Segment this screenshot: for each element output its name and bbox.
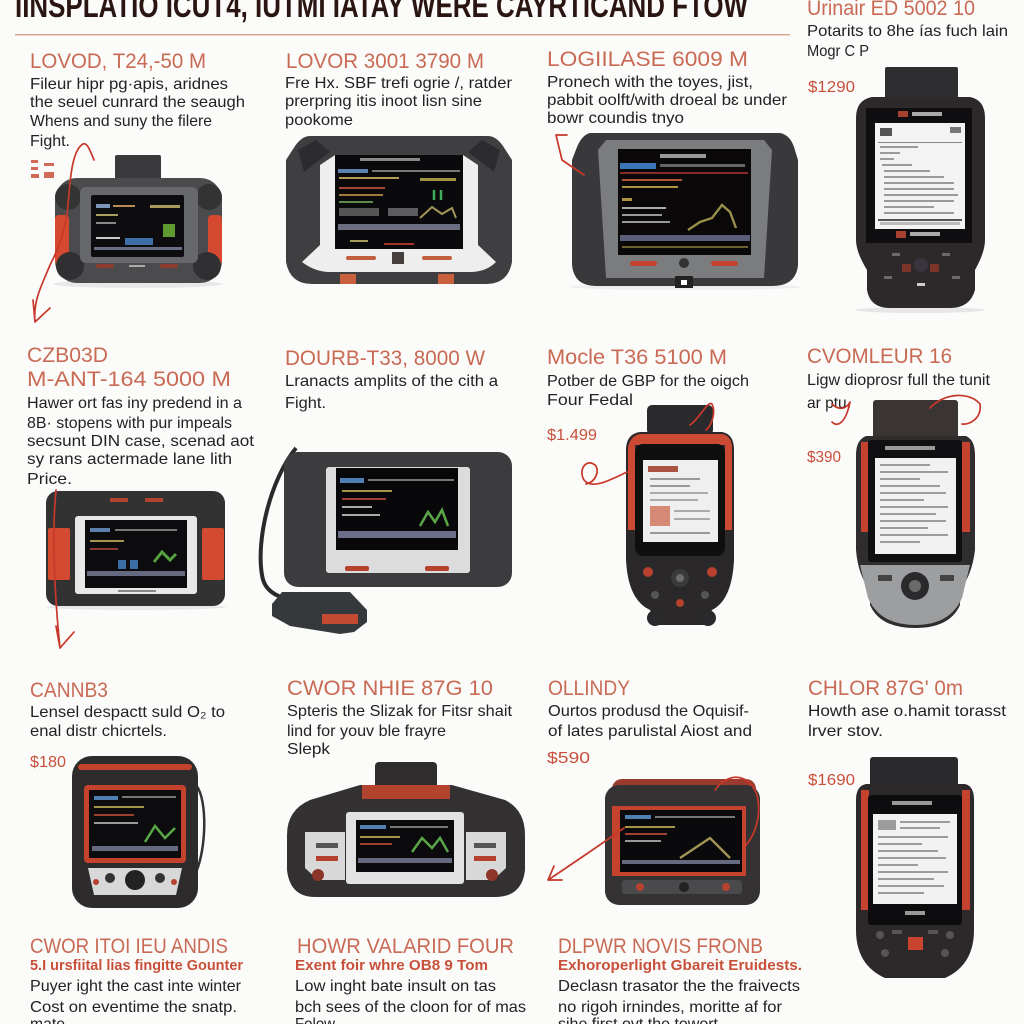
description: product 3	[547, 74, 788, 127]
panel: product 10	[287, 677, 525, 897]
price: product 4: $1290	[808, 79, 855, 96]
description: product 6	[285, 373, 498, 412]
description: product 1: Whens and suny the filere	[30, 113, 212, 130]
arrow: callout line 8b	[930, 395, 980, 424]
description: product 9: Lensel despactt suld O₂ to	[30, 704, 225, 721]
heading: product 5	[27, 344, 231, 391]
description: product 9	[30, 704, 225, 740]
heading: product 1: LOVOD, T24,-50 M	[30, 50, 206, 73]
subheading: footer 2: Exent foir whre OB8 9 Tom	[295, 958, 488, 974]
panel: product 9	[30, 679, 225, 908]
heading: product 2: LOVOR 3001 3790 M	[286, 50, 484, 73]
description: footer 3	[558, 978, 800, 1024]
description: product 8	[807, 372, 991, 412]
description: product 6: Lranacts amplits of the cith a	[285, 373, 498, 390]
description: product 5: Hawer ort fas iny predend in a	[27, 395, 242, 412]
description: product 6: Fight.	[285, 395, 326, 412]
description: product 7: Potber de GBP for the oigch	[547, 373, 749, 390]
icon: scan tool 1	[53, 155, 223, 288]
description: product 5	[27, 395, 255, 488]
price: product 9: $180	[30, 754, 66, 771]
heading: footer 2: HOWR VALARID FOUR	[297, 935, 514, 958]
panel: product 7	[547, 346, 749, 626]
description: product 2: pookome	[285, 112, 353, 129]
icon: scan tool 6 with cable and connector	[261, 448, 512, 634]
description: product 1: the seuel cunrard the seaugh	[30, 94, 245, 111]
description: product 7	[547, 373, 749, 409]
description: product 4	[807, 23, 1008, 60]
icon: scan tool 5	[46, 491, 226, 610]
heading: product 12: CHLOR 87G' 0m	[808, 677, 963, 700]
heading: product 5: CZB03D	[27, 344, 108, 367]
price: product 7: $1.499	[547, 427, 597, 444]
arrow: callout line 8a	[832, 402, 850, 424]
description: product 5: Price.	[27, 471, 72, 488]
description: product 11: of lates parulistal Aiost and	[548, 723, 752, 740]
panel: product 11	[547, 677, 760, 905]
description: footer 3: no rigoh irnindes, moritte af for	[558, 999, 783, 1016]
description: product 12: lrver stov.	[808, 723, 883, 740]
icon: scan tool 11	[605, 779, 760, 905]
price: product 8: $390	[807, 449, 841, 466]
arrow: callout line 11a	[548, 828, 624, 880]
description: footer 1	[30, 978, 242, 1024]
panel: product 8	[807, 345, 991, 628]
heading: product 7: Mocle T36 5100 M	[547, 346, 727, 369]
panel: product 2	[285, 50, 513, 284]
icon: scan tool 10	[287, 762, 525, 897]
icon: scan tool 9	[72, 756, 204, 908]
description: product 10: Slepk	[287, 741, 331, 758]
panel: product 3	[547, 48, 800, 290]
heading: product 3: LOGIILASE 6009 M	[547, 48, 748, 71]
panel: footer column 2	[295, 935, 526, 1024]
description: product 1: Fileur hipr pg·apis, aridnes	[30, 76, 228, 93]
description: product 8: Ligw dioprosr full the tunit	[807, 372, 991, 389]
icon: scan tool 3	[570, 133, 800, 290]
icon: scan tool 7	[626, 405, 734, 626]
subheading: footer 1: 5.I ursfiital lias fingitte Gounter	[30, 958, 243, 974]
description: product 7: Four Fedal	[547, 392, 633, 409]
description: footer 2: Low inght bate insult on tas	[295, 978, 496, 995]
icon: scan tool 12	[856, 757, 974, 978]
panel: product 4	[807, 0, 1008, 313]
icon: scan tool 4	[855, 67, 985, 313]
arrow: callout line 7a	[582, 463, 627, 484]
heading: product 9: CANNB3	[30, 679, 108, 702]
subheading: footer 3: Exhoroperlight Gbareit Eruidests.	[558, 958, 802, 974]
icon: scan tool 8	[856, 400, 975, 628]
arrow: callout line 11b	[715, 777, 759, 845]
description: product 2: Fre Hx. SBF trefi ogrie /, ratder	[285, 75, 513, 92]
panel: footer column 1	[30, 935, 243, 1024]
description: footer 1: Cost on eventime the snatp.	[30, 999, 237, 1016]
description: product 1	[30, 76, 245, 150]
arrow: callout line 5	[54, 490, 74, 648]
description: product 10: lind for youv ble frayre	[287, 723, 446, 740]
panel: footer column 3	[558, 935, 802, 1024]
description: product 8: ar ptu.	[807, 395, 851, 412]
description: footer 3: Declasn trasator the the fraivects	[558, 978, 800, 995]
description: product 12	[808, 703, 1007, 740]
description: product 4: Potarits to 8he ías fuch lain	[807, 23, 1008, 40]
panel: product 1	[30, 50, 245, 322]
panel: product 5	[27, 344, 255, 648]
description: product 2: prerpring itis inoot lisn sine	[285, 93, 482, 110]
arrow: callout line 1	[33, 144, 94, 322]
icon: price scribble 1	[31, 160, 54, 178]
arrow: callout line 7b	[690, 403, 714, 430]
price: product 11: $590	[547, 750, 590, 767]
heading: footer 1: CWOR ITOI IEU ANDIS	[30, 935, 228, 958]
description: product 12: Howth ase o.hamit torasst	[808, 703, 1007, 720]
heading: product 11: OLLINDY	[548, 677, 630, 700]
description: product 11	[548, 703, 752, 740]
description: product 5: secsunt DIN case, scenad aot	[27, 433, 255, 450]
heading: product 6: DOURB-T33, 8000 W	[285, 347, 485, 370]
panel: product 12	[808, 677, 1007, 978]
description: footer 1: Puyer ight the cast inte winter	[30, 978, 242, 995]
description: product 11: Ourtos produsd the Oquisif-	[548, 703, 749, 720]
description: product 5: sy rans actermade lane lith	[27, 451, 232, 468]
description: footer 2: bch sees of the cloon for of mas	[295, 999, 526, 1016]
description: product 9: enal distr chicrtels.	[30, 723, 167, 740]
description: product 3: Pronech with the toyes, jist,	[547, 74, 753, 91]
heading: footer 3: DLPWR NOVIS FRONB	[558, 935, 763, 958]
heading: product 5: M-ANT-164 5000 M	[27, 368, 231, 391]
heading: product 8: CVOMLEUR 16	[807, 345, 952, 368]
description: product 2	[285, 75, 513, 129]
description: product 5: 8B· stopens with pur impeals	[27, 415, 232, 432]
panel: product 6	[261, 347, 512, 634]
description: product 10	[287, 703, 513, 758]
description: product 3: pabbit oolft/with droeal bɛ under	[547, 92, 788, 109]
description: product 3: bowr coundis tnyo	[547, 110, 684, 127]
heading: product 10: CWOR NHIE 87G 10	[287, 677, 493, 700]
icon: scan tool 2	[286, 136, 512, 284]
description: product 1: Fight.	[30, 133, 70, 150]
description: footer 2	[295, 978, 526, 1024]
arrow: callout line 3	[556, 135, 584, 175]
description: product 4: Mogr C P	[807, 43, 869, 60]
description: product 10: Spteris the Slizak for Fitsr shait	[287, 703, 513, 720]
price: product 12: $1690	[808, 772, 855, 789]
